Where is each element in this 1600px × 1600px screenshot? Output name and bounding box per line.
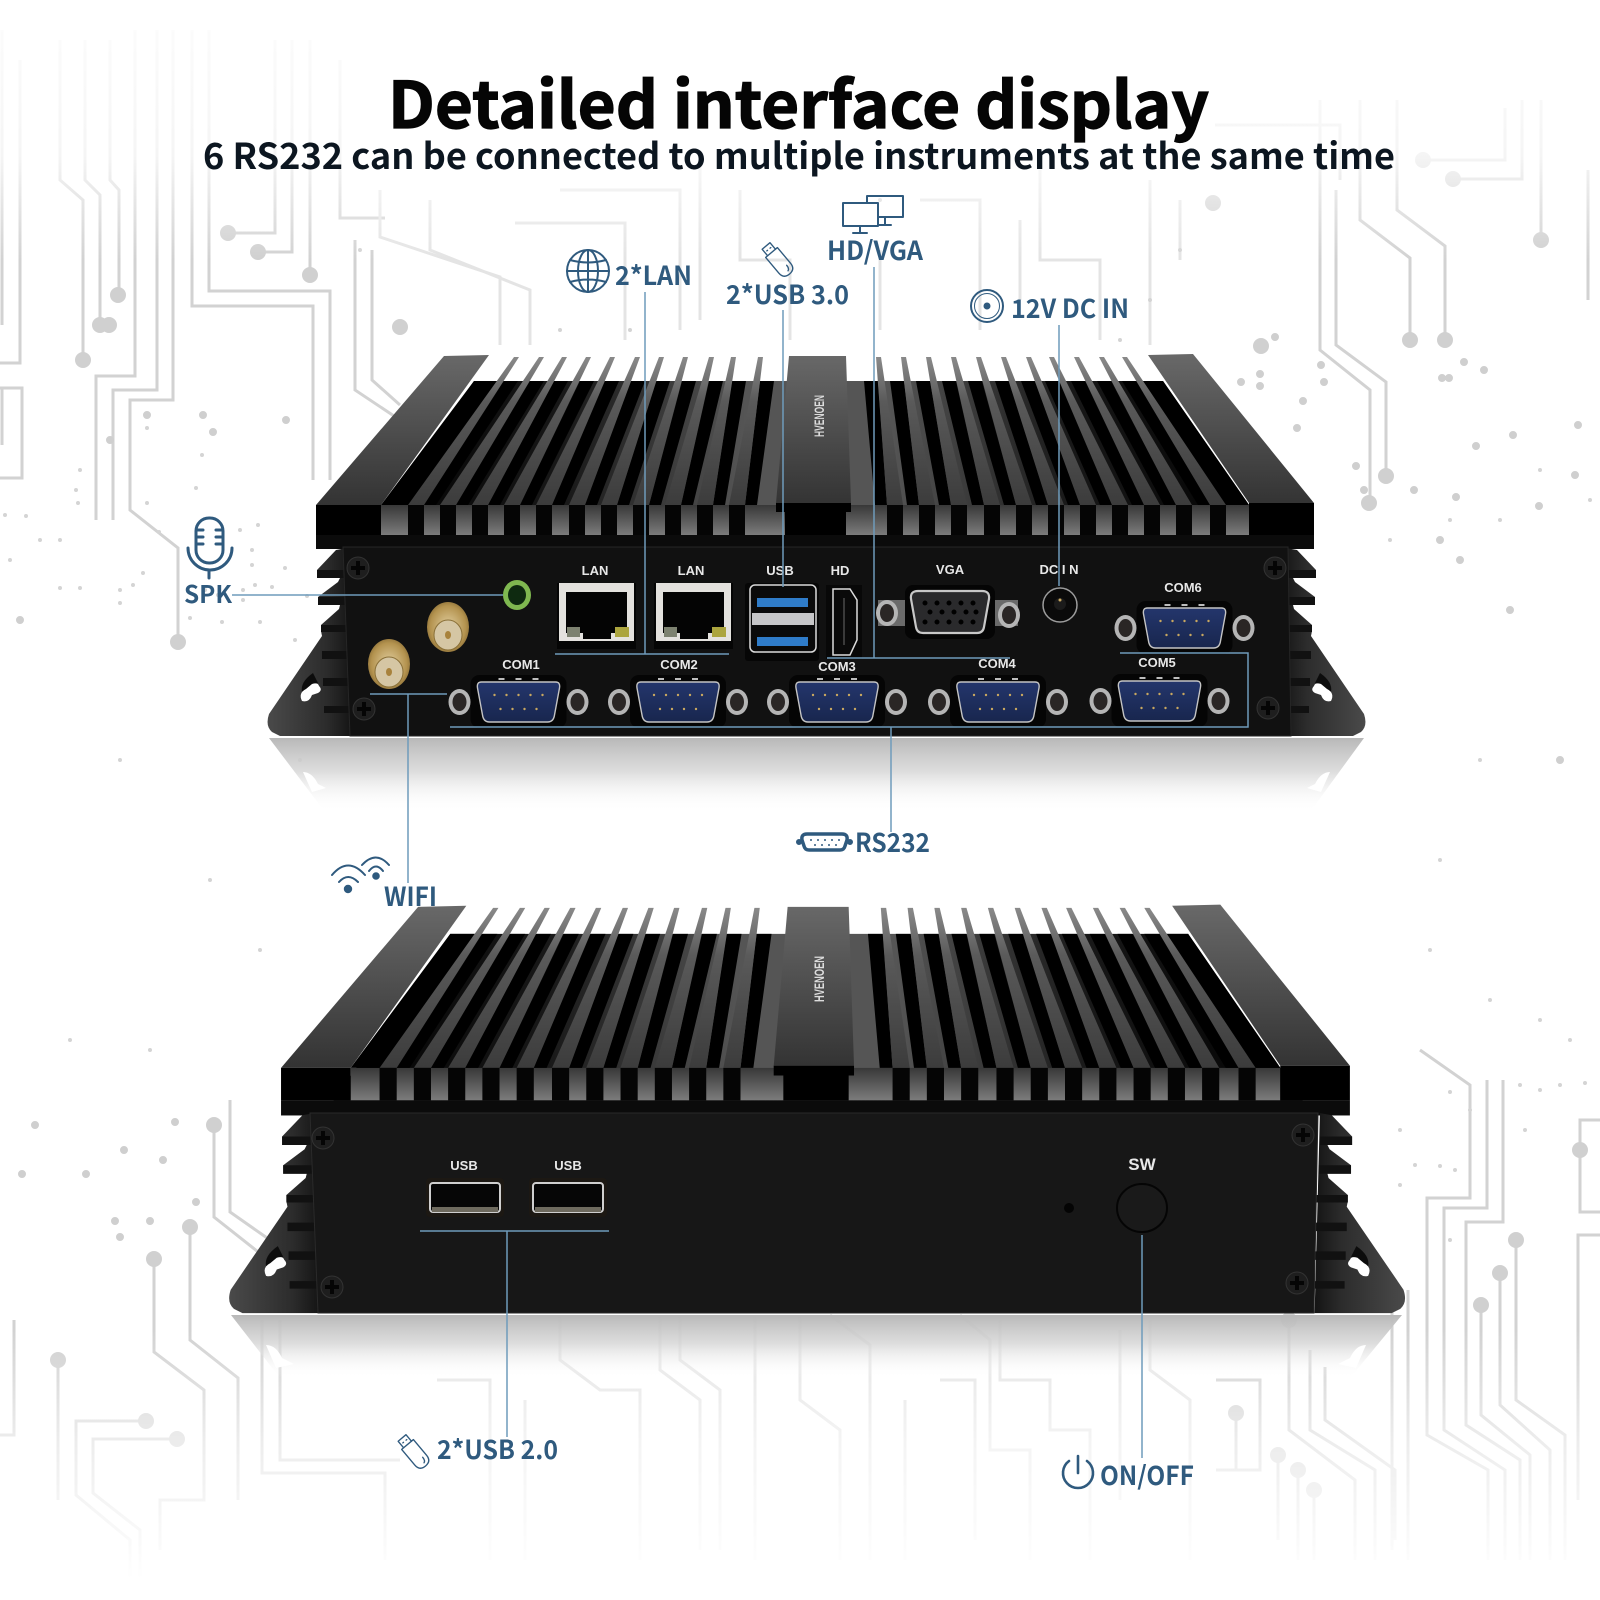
DC power jack bbox=[1040, 562, 1078, 622]
COM ports: COM6 bbox=[1164, 580, 1202, 595]
label: 2*USB 2.0 with stick icon bbox=[396, 1430, 558, 1471]
label: WIFI with signal icon: WIFI bbox=[384, 877, 437, 914]
reflection under bottom device bbox=[231, 1315, 1402, 1378]
label: 2*LAN with globe icon: 2*LAN bbox=[615, 256, 692, 293]
label: HD/VGA with monitors icon bbox=[827, 196, 923, 268]
label: ON/OFF with power icon bbox=[1063, 1456, 1194, 1493]
device: front view bbox=[229, 905, 1405, 1313]
left mounting flange bbox=[268, 548, 354, 736]
status LED bbox=[1064, 1203, 1074, 1213]
icon: wifi signals bbox=[332, 858, 389, 892]
label: WIFI with signal icon bbox=[332, 858, 437, 914]
COM ports: COM3 bbox=[818, 659, 856, 674]
label: RS232 with connector icon: RS232 bbox=[855, 823, 930, 860]
icon: USB stick bbox=[396, 1433, 431, 1471]
icon: USB stick bbox=[760, 241, 795, 279]
right mounting flange bbox=[1312, 1113, 1405, 1313]
label: SPK with microphone icon bbox=[184, 518, 233, 610]
brand logo: HVENOEN bbox=[811, 395, 827, 437]
callout lines bbox=[232, 267, 1248, 1458]
label: 2*LAN with globe icon bbox=[567, 250, 692, 293]
rear panel bbox=[343, 547, 1291, 736]
icon: globe bbox=[567, 250, 609, 292]
device: rear view bbox=[268, 354, 1365, 736]
USB 2.0 ports: USB bbox=[554, 1158, 582, 1173]
subtitle: 6 RS232 can be connected to multiple instruments at the same time bbox=[203, 128, 1395, 180]
COM ports: COM2 bbox=[660, 657, 698, 672]
USB 2.0 ports bbox=[426, 1158, 607, 1217]
VGA port bbox=[876, 562, 1020, 639]
front panel bbox=[310, 1113, 1318, 1313]
heatsink fins bbox=[316, 354, 1314, 549]
HDMI port bbox=[826, 563, 862, 659]
icon: microphone bbox=[188, 518, 232, 578]
label: 2*USB 3.0 with stick icon: 2*USB 3.0 bbox=[726, 275, 849, 312]
label: 12V DC IN with jack icon: 12V DC IN bbox=[1011, 289, 1129, 326]
COM ports: COM5 bbox=[1138, 655, 1176, 670]
audio jack bbox=[503, 580, 531, 610]
icon: DC jack bbox=[971, 290, 1003, 322]
LAN ports bbox=[557, 563, 733, 649]
reflection under top device bbox=[269, 738, 1364, 812]
VGA port: VGA bbox=[936, 562, 965, 577]
USB 3.0 ports: USB bbox=[766, 563, 794, 578]
label: 2*USB 2.0 with stick icon: 2*USB 2.0 bbox=[437, 1430, 558, 1467]
power button: SW bbox=[1128, 1155, 1157, 1174]
label: SPK with microphone icon: SPK bbox=[184, 575, 233, 610]
title: Detailed interface display bbox=[388, 55, 1209, 147]
HDMI port: HD bbox=[831, 563, 849, 578]
LAN ports: LAN bbox=[678, 563, 704, 578]
icon: power bbox=[1063, 1456, 1093, 1488]
brand logo: HVENOEN bbox=[811, 956, 827, 1002]
left mounting flange bbox=[229, 1113, 322, 1313]
label: 2*USB 3.0 with stick icon bbox=[726, 241, 849, 312]
label: RS232 with connector icon bbox=[799, 823, 930, 860]
power button bbox=[1117, 1155, 1167, 1232]
screws bbox=[347, 557, 1286, 720]
LAN ports: LAN bbox=[582, 563, 608, 578]
screws bbox=[312, 1124, 1314, 1298]
label: ON/OFF with power icon: ON/OFF bbox=[1100, 1456, 1194, 1493]
right mounting flange bbox=[1279, 548, 1365, 736]
icon: serial connector bbox=[799, 834, 850, 850]
DC power jack: DC I N bbox=[1040, 562, 1078, 577]
USB 3.0 ports bbox=[745, 563, 819, 661]
USB 2.0 ports: USB bbox=[450, 1158, 478, 1173]
label: HD/VGA with monitors icon: HD/VGA bbox=[827, 231, 923, 268]
icon: monitors bbox=[843, 196, 903, 233]
antenna connectors bbox=[368, 602, 469, 689]
COM ports: COM1 bbox=[502, 657, 540, 672]
COM ports: COM4 bbox=[978, 656, 1017, 671]
heatsink fins bbox=[281, 905, 1350, 1115]
COM ports bbox=[448, 580, 1254, 728]
